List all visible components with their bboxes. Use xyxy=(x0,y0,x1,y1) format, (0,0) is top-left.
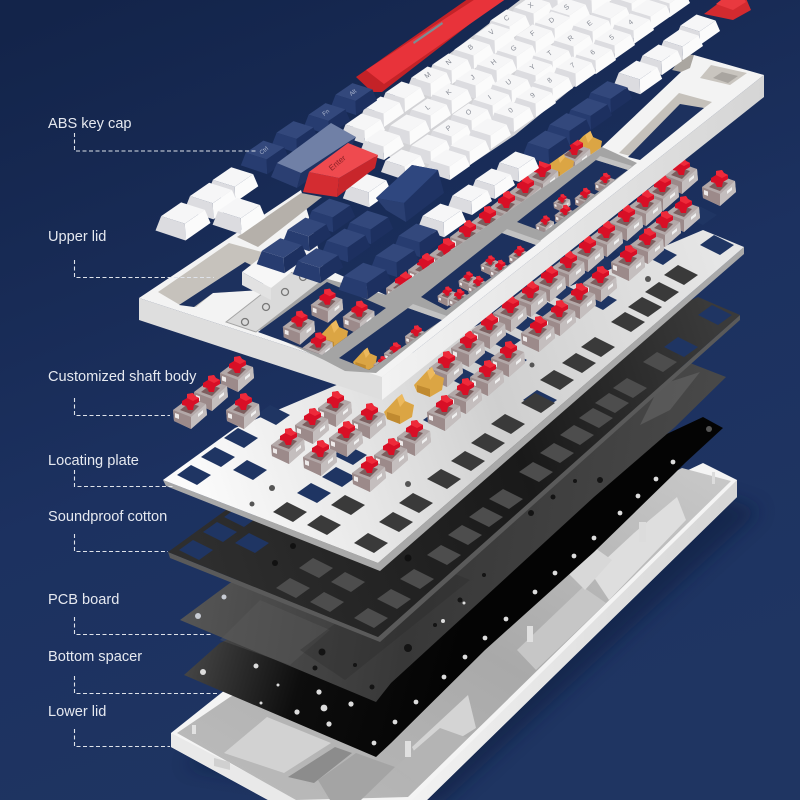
key legends: G xyxy=(510,44,518,53)
label: Upper lid: Upper lid xyxy=(48,229,106,245)
rear switch row seen through upper lid xyxy=(386,130,602,307)
PCB board xyxy=(180,363,726,702)
red space bar xyxy=(356,0,510,92)
key legends: R xyxy=(567,35,575,43)
label: Locating plate xyxy=(48,453,173,486)
wide navy key xyxy=(376,165,444,222)
key legends: U xyxy=(505,79,513,87)
lower lid xyxy=(171,463,760,800)
key legends: 8 xyxy=(546,77,554,85)
white letter key rows xyxy=(341,0,690,180)
red enter key: Enter xyxy=(327,153,348,173)
locating plate xyxy=(163,205,744,571)
key legends: S xyxy=(563,3,571,12)
key legends: I xyxy=(487,94,493,101)
key legends: J xyxy=(470,74,477,82)
key legends: T xyxy=(546,49,554,58)
key legends: V xyxy=(488,28,496,37)
label: Soundproof cotton xyxy=(48,509,168,552)
key legends: H xyxy=(490,59,498,67)
key legends: D xyxy=(548,17,556,25)
key legends: M xyxy=(424,71,433,80)
key legends: F xyxy=(529,30,537,38)
key legends: 4 xyxy=(627,19,635,27)
key legends: E xyxy=(586,19,594,28)
key legends: 0 xyxy=(507,107,515,115)
red escape key xyxy=(704,0,751,20)
label: Locating plate: Locating plate xyxy=(48,453,139,469)
grey-blue shift key xyxy=(271,123,356,188)
navy modifier keys: Alt xyxy=(349,88,358,98)
label: Lower lid xyxy=(48,704,170,746)
bottom spacer xyxy=(184,417,723,757)
key legends: C xyxy=(503,15,511,23)
label: PCB board: PCB board xyxy=(48,592,119,608)
navy modifier keys xyxy=(241,83,377,174)
white key beside enter xyxy=(343,174,391,207)
soundproof cotton xyxy=(168,297,740,642)
customized shaft body switches xyxy=(173,158,736,492)
key legends: 9 xyxy=(529,92,537,100)
ABS key caps xyxy=(156,0,751,300)
red enter key xyxy=(303,143,378,197)
white key under navy cluster xyxy=(242,258,294,300)
key legends xyxy=(424,1,635,133)
label: ABS key cap xyxy=(48,116,256,151)
label: Upper lid xyxy=(48,229,214,278)
key legends: N xyxy=(445,59,453,67)
white arrow keys xyxy=(156,167,265,240)
key legends: L xyxy=(424,104,432,112)
white F-row and navy function keys xyxy=(418,14,720,237)
key legends: P xyxy=(445,124,453,133)
key legends: X xyxy=(527,1,535,10)
label: Customized shaft body xyxy=(48,369,197,416)
label: Customized shaft body: Customized shaft body xyxy=(48,369,197,385)
key legends: O xyxy=(465,108,474,117)
label: Lower lid: Lower lid xyxy=(48,704,106,720)
label: ABS key cap: ABS key cap xyxy=(48,116,132,132)
key legends: 6 xyxy=(589,49,597,57)
key legends: 7 xyxy=(569,62,577,70)
label: Soundproof cotton: Soundproof cotton xyxy=(48,509,167,525)
key legends: B xyxy=(467,43,475,52)
label: Bottom spacer xyxy=(48,649,218,694)
navy modifier keys: Fn xyxy=(322,109,331,118)
label: PCB board xyxy=(48,592,213,634)
upper lid xyxy=(139,54,764,400)
label: Bottom spacer: Bottom spacer xyxy=(48,649,142,665)
switches inside upper lid wells xyxy=(283,173,615,374)
key legends: 5 xyxy=(608,34,616,42)
key legends: K xyxy=(445,88,453,97)
navy navigation keys xyxy=(257,199,442,299)
key legends: Y xyxy=(529,63,537,72)
navy modifier keys: Ctrl xyxy=(259,146,270,156)
